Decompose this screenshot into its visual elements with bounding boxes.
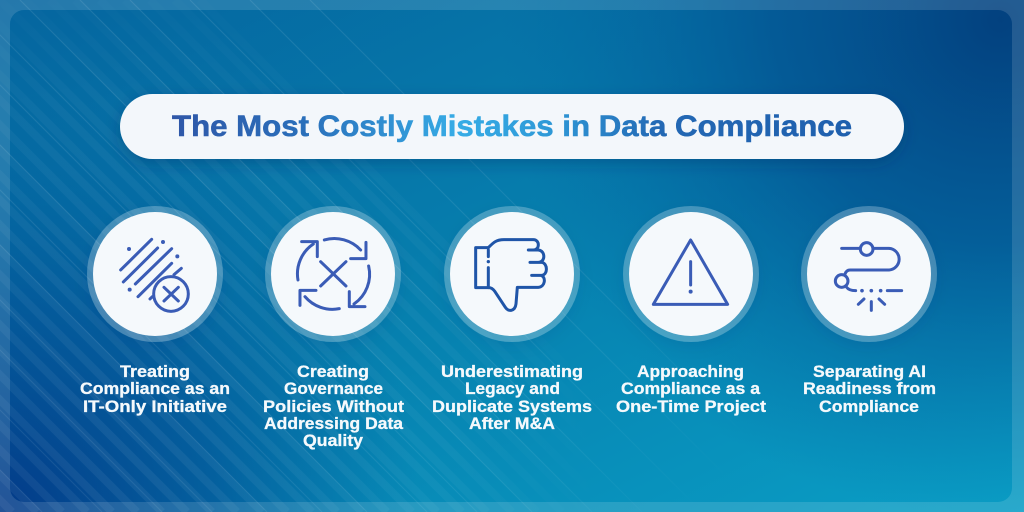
panel: IT-only initiative <box>80 206 230 416</box>
label: underestimating: Legacy and <box>465 379 560 398</box>
panel: AI readiness <box>801 206 937 416</box>
label: creating governance: Quality <box>303 431 364 450</box>
label: separating AI <box>803 362 936 416</box>
label: underestimating: After M&A <box>469 414 555 433</box>
label: creating governance: Policies Without <box>263 397 404 416</box>
icon: warning triangle <box>653 240 728 304</box>
title banner <box>120 94 904 159</box>
label: treating compliance: IT-Only Initiative <box>83 397 227 416</box>
icon: path with nodes <box>835 243 902 310</box>
icon: striped block with x <box>121 239 188 311</box>
icon: cycle arrows with x <box>297 239 370 309</box>
label: separating AI: Readiness from <box>803 379 936 398</box>
label: approaching compliance: Compliance as a <box>621 379 761 398</box>
label: separating AI: Compliance <box>819 397 919 416</box>
panel: legacy systems <box>432 206 592 433</box>
label: approaching compliance: Approaching <box>637 362 744 381</box>
icon: thumbs down <box>476 240 546 310</box>
label: creating governance: Addressing Data <box>264 414 404 433</box>
label: underestimating: Duplicate Systems <box>432 397 592 416</box>
label: treating compliance: Compliance as an <box>80 379 230 398</box>
label: approaching compliance: One-Time Project <box>616 397 766 416</box>
label: creating governance <box>263 362 404 450</box>
panel: one-time project <box>616 206 766 416</box>
label: treating compliance <box>80 362 230 416</box>
label: creating governance: Creating <box>297 362 369 381</box>
label: approaching compliance <box>616 362 766 416</box>
label: creating governance: Governance <box>284 379 383 398</box>
title: The Most Costly Mistakes in Data Compliance <box>172 110 852 143</box>
label: treating compliance: Treating <box>120 362 190 381</box>
label: underestimating <box>432 362 592 433</box>
label: separating AI: Separating AI <box>813 362 926 381</box>
label: underestimating: Underestimating <box>441 362 583 381</box>
panel: governance policies <box>263 206 404 450</box>
